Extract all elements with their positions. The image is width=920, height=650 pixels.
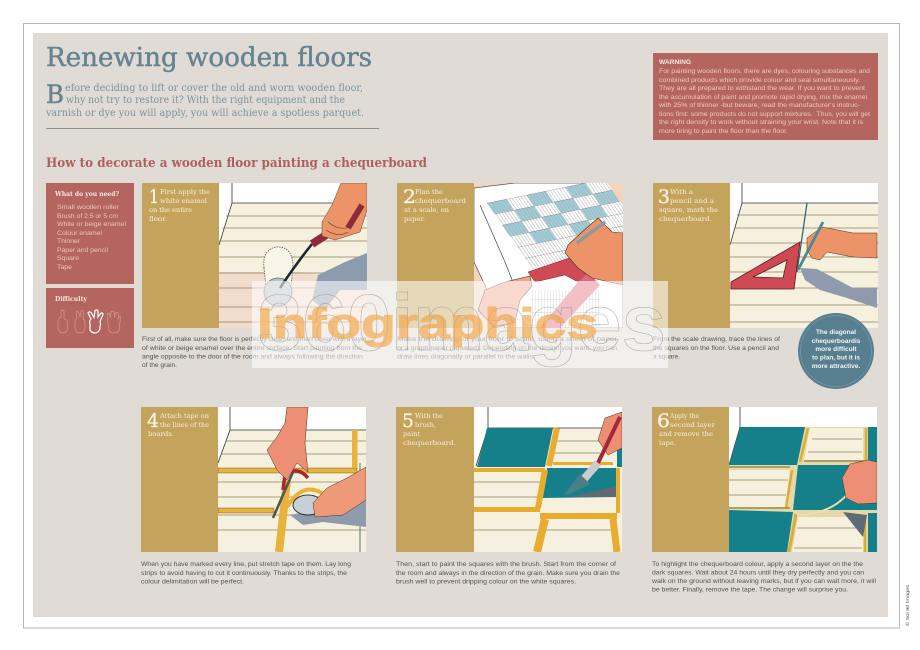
callout circle: chequerboardis [812,338,861,345]
step 5 caption box: With the [415,412,443,420]
step 3 caption box: pencil and a [670,197,714,205]
step 1 caption box [142,183,219,328]
step 1 text: of the grain. [142,362,177,369]
difficulty panel [46,288,134,348]
step 4 caption box: boards. [148,430,174,438]
step 1 text: angle opposite to the door of the room and always following the direction [142,354,363,360]
what do you need panel: Colour enamel [57,230,103,237]
step 2 caption box: 2 [403,186,416,208]
step 1 caption box: First apply the [160,188,210,196]
step 1 caption box: floor. [149,215,167,223]
step 5 caption box: chequerboard. [403,439,456,447]
icon: two finger hand [75,310,85,333]
step 6 text: To highlight the chequerboard colour, apply a second layer on the the [652,561,863,568]
callout circle: more difficult [815,346,857,353]
step 4 illustration: taping lines [218,407,366,552]
step 3 text: a square. [653,354,680,360]
hand [598,412,622,455]
step 5 text: Then, start to paint the squares with the brush. Start from the corner of [396,561,616,568]
intro paragraph: why not try to restore it? With the right equipment and the [66,95,345,106]
step 3 text [653,336,780,360]
warning box: WARNING [659,59,691,66]
icon: three finger hand highlighted [88,310,103,333]
step 1 illustration: roller on floor [219,183,367,328]
step 2 text: Make the drawing of your floor to scale, using a sheet of paper [397,336,618,343]
step 5 caption box: 5 [402,410,414,432]
difficulty panel: Difficulty [55,295,87,303]
step 4 caption box: the lines of the [160,421,209,429]
step 5 text [396,561,620,586]
step 3 text: the squares on the floor. Use a pencil and [653,345,779,352]
step 5 caption box: paint [403,430,420,438]
intro paragraph: efore deciding to lift or cover the old and worn wooden floor, [65,83,363,94]
what do you need panel: What do you need? [54,190,119,198]
icon: four finger hand [107,311,121,333]
what do you need panel [46,183,134,284]
step 6 text: walk on the ground without leaving marks, but if you can wait more, it will [651,578,876,585]
step 2 caption box: chequerboard [415,197,467,205]
step 3 caption box: With a [670,188,693,196]
icon: one finger hand [58,310,68,333]
step 5 caption box: brush, [415,421,436,429]
warning box: with 25% of thinner -but beware, read the manufacturer's instruc- [658,102,860,109]
step 5 [396,407,622,586]
title: Renewing wooden floors [46,43,372,73]
step 6 text [651,561,876,594]
what do you need panel: Thinner [57,238,81,245]
warning box: For painting wooden floors, there are dyes, colouring substances and [659,68,871,75]
warning box: They are all prepared to withstand the wear. If you want to prevent [659,85,865,92]
step 3 caption box: chequerboard. [659,215,712,223]
right hand [313,467,366,517]
step 4 [141,407,366,586]
step 6 caption box: and remove the [659,430,713,438]
what do you need panel: Brush of 2.5 or 5 cm [57,213,119,220]
hand with pencil [807,227,877,260]
step 4 caption box: Attach tape on [159,412,210,420]
step 2 text: or a graph paper (squared). Depending on the design you want, you can [397,345,617,352]
intro paragraph: varnish or dye you will apply, you will achieve a spotless parquet. [45,108,364,119]
warning box: the right density to work without straining your wrist. Note that it is [659,119,863,126]
step 1 text [142,336,368,369]
what do you need panel: Tape [57,264,72,271]
left hand [478,276,532,328]
step 3 [653,183,878,360]
step 6 text: dark squares. Wait about 24 hours until they dry perfectly and you can [652,570,864,576]
red set square [731,242,800,289]
step 1 caption box: 1 [149,186,159,208]
step 2 text [397,336,618,360]
callout circle: more attractive. [812,363,860,370]
step 2 caption box [397,183,474,328]
step 1 text: of white or beige enamel over the entire surface. Start painting from the [142,345,362,352]
right hand with pencil [565,218,623,285]
watermark: Infographics [257,300,598,348]
step 6 caption box: Apply the [669,412,699,420]
what do you need panel: White or beige enamel [57,221,127,228]
callout circle: The diagonal [816,329,856,336]
step 4 text: strips to avoid having to cut it continuously. Thanks to the strips, the [141,570,347,577]
step 4 caption box: 4 [147,410,159,432]
callout circle: to plan, but it is [812,354,860,362]
warning box: the accumulation of paint and promote rapid drying, mix the enamel [659,94,867,101]
step 5 caption box [396,407,474,552]
step 4 caption box [141,407,218,552]
step 2 text: draw lines diagonally or parallel to the walls. [397,354,535,360]
step 2 [397,183,623,360]
callout circle [798,313,874,389]
step 1 text: First of all, make sure the floor is perfectly clean and then cover with a layer [142,336,368,343]
step 6 text: be better. Finally, remove the tape. The change will surprise you. [652,586,848,594]
step 5 illustration: painting squares [474,407,622,552]
pulled tape strip [797,488,852,515]
what do you need panel: Paper and pencil [57,247,109,254]
step 6 illustration: finished chequerboard [729,407,877,552]
warning box [653,53,878,140]
step 3 text: From the scale drawing, trace the lines of [653,336,780,343]
step 4 text [141,561,351,586]
step 6 caption box [652,407,729,552]
step 1 caption box: white enamel [160,197,207,205]
step 3 caption box [653,183,730,328]
chequerboard plan grid [487,183,623,270]
copyright credit: © Sol 90 Images [904,584,910,626]
what do you need panel: Square [57,255,79,262]
watermark: 360images [258,278,666,367]
step 5 text: brush well to prevent dripping colour on the white squares. [396,578,576,586]
step 6 caption box: tape. [659,439,676,447]
step 6 caption box: 6 [657,410,670,432]
step 6 [651,407,877,594]
step 3 caption box: square, mark the [659,206,718,214]
warning box: tions first: some products do not support mixtures. Thus, you will get [659,111,870,118]
drop cap: B [46,80,64,109]
warning box: more tiring to paint the floor than the floor. [659,128,788,135]
step 1 caption box: on the entire [149,206,192,214]
section heading: How to decorate a wooden floor painting a chequerboard [46,156,427,171]
step 2 caption box: paper. [404,215,425,223]
paint brush [564,417,620,495]
roll of tape [287,489,327,515]
step 4 text: When you have marked every line, put stretch tape on them. Lay long [141,561,351,568]
step 3 caption box: 3 [658,186,670,208]
intro paragraph [45,80,364,119]
step 5 text: the room and always in the direction of the grain. Make sure you drain the [396,570,620,577]
step 2 caption box: Plan the [415,188,443,196]
step 4 text: colour delimitation will be perfect. [141,578,244,586]
step 3 illustration: marking with square [730,183,878,328]
step 2 illustration: plan on paper [474,183,623,328]
what do you need panel: Small woollen roller [57,204,120,211]
step 6 caption box: second layer [670,421,716,429]
scissors [273,471,308,518]
hand [842,460,877,504]
step 2 caption box: at a scale, on [404,206,450,214]
warning box: combined products which provide colour and seal simultaneously. [659,77,860,84]
left arm [267,407,308,480]
red square ruler [528,257,588,282]
step 1 [142,183,368,369]
